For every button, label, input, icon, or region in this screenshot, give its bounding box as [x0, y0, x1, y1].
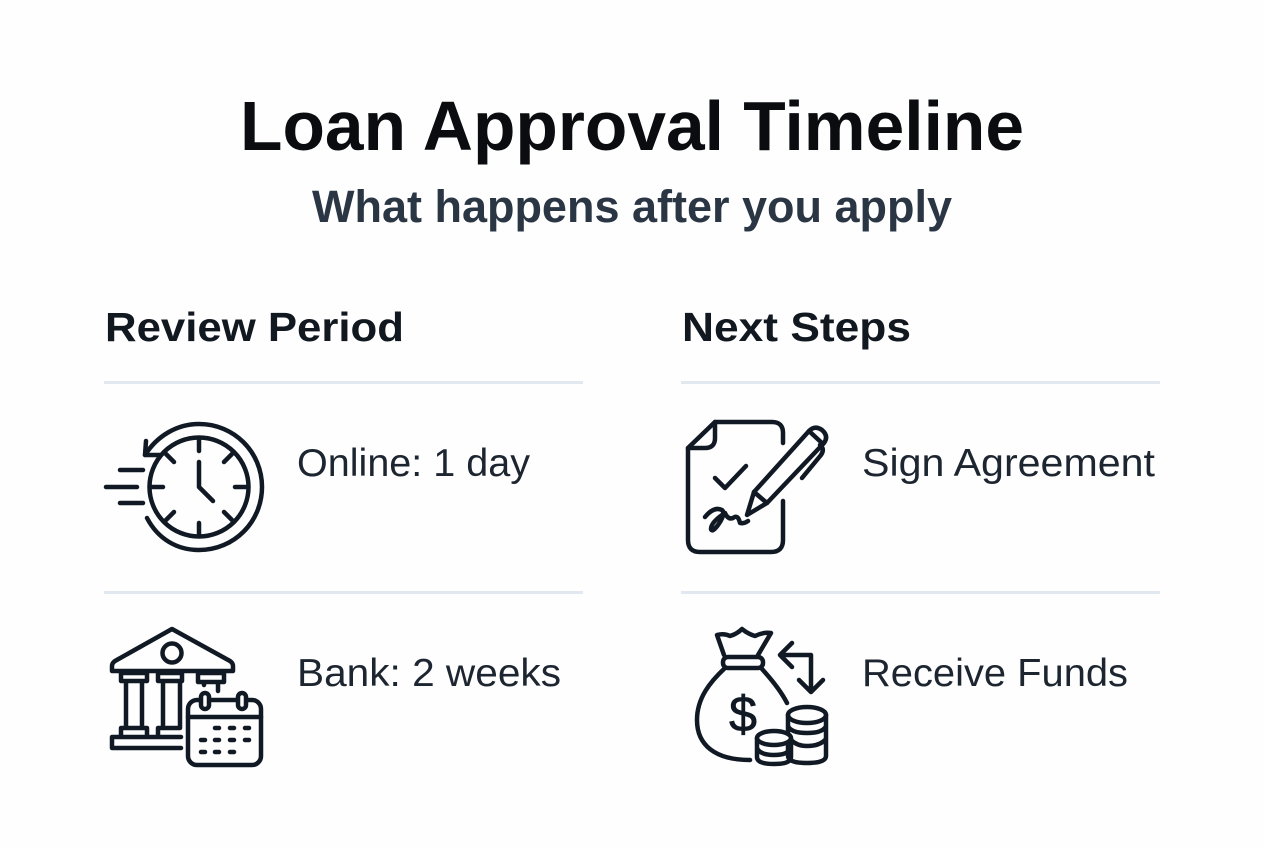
- label: sign agreement: Sign Agreement: [862, 442, 1155, 485]
- panel: review period: [104, 304, 583, 765]
- label: online: Online: 1 day: [297, 442, 531, 485]
- heading: review period: Review Period: [105, 304, 404, 350]
- heading: next steps: Next Steps: [682, 304, 911, 350]
- panel: next steps: [681, 304, 1160, 764]
- icon: clock with return arrow: [106, 424, 262, 550]
- icon: bank with calendar: [112, 629, 261, 765]
- label: receive funds: Receive Funds: [862, 652, 1128, 695]
- label: bank: Bank: 2 weeks: [297, 652, 561, 695]
- subtitle: What happens after you apply: [312, 181, 952, 232]
- icon: signed document with pen: [688, 422, 826, 552]
- title: Loan Approval Timeline: [240, 87, 1024, 165]
- icon: dollar sign: $: [729, 686, 757, 742]
- icon: money bag with coins: [697, 629, 826, 764]
